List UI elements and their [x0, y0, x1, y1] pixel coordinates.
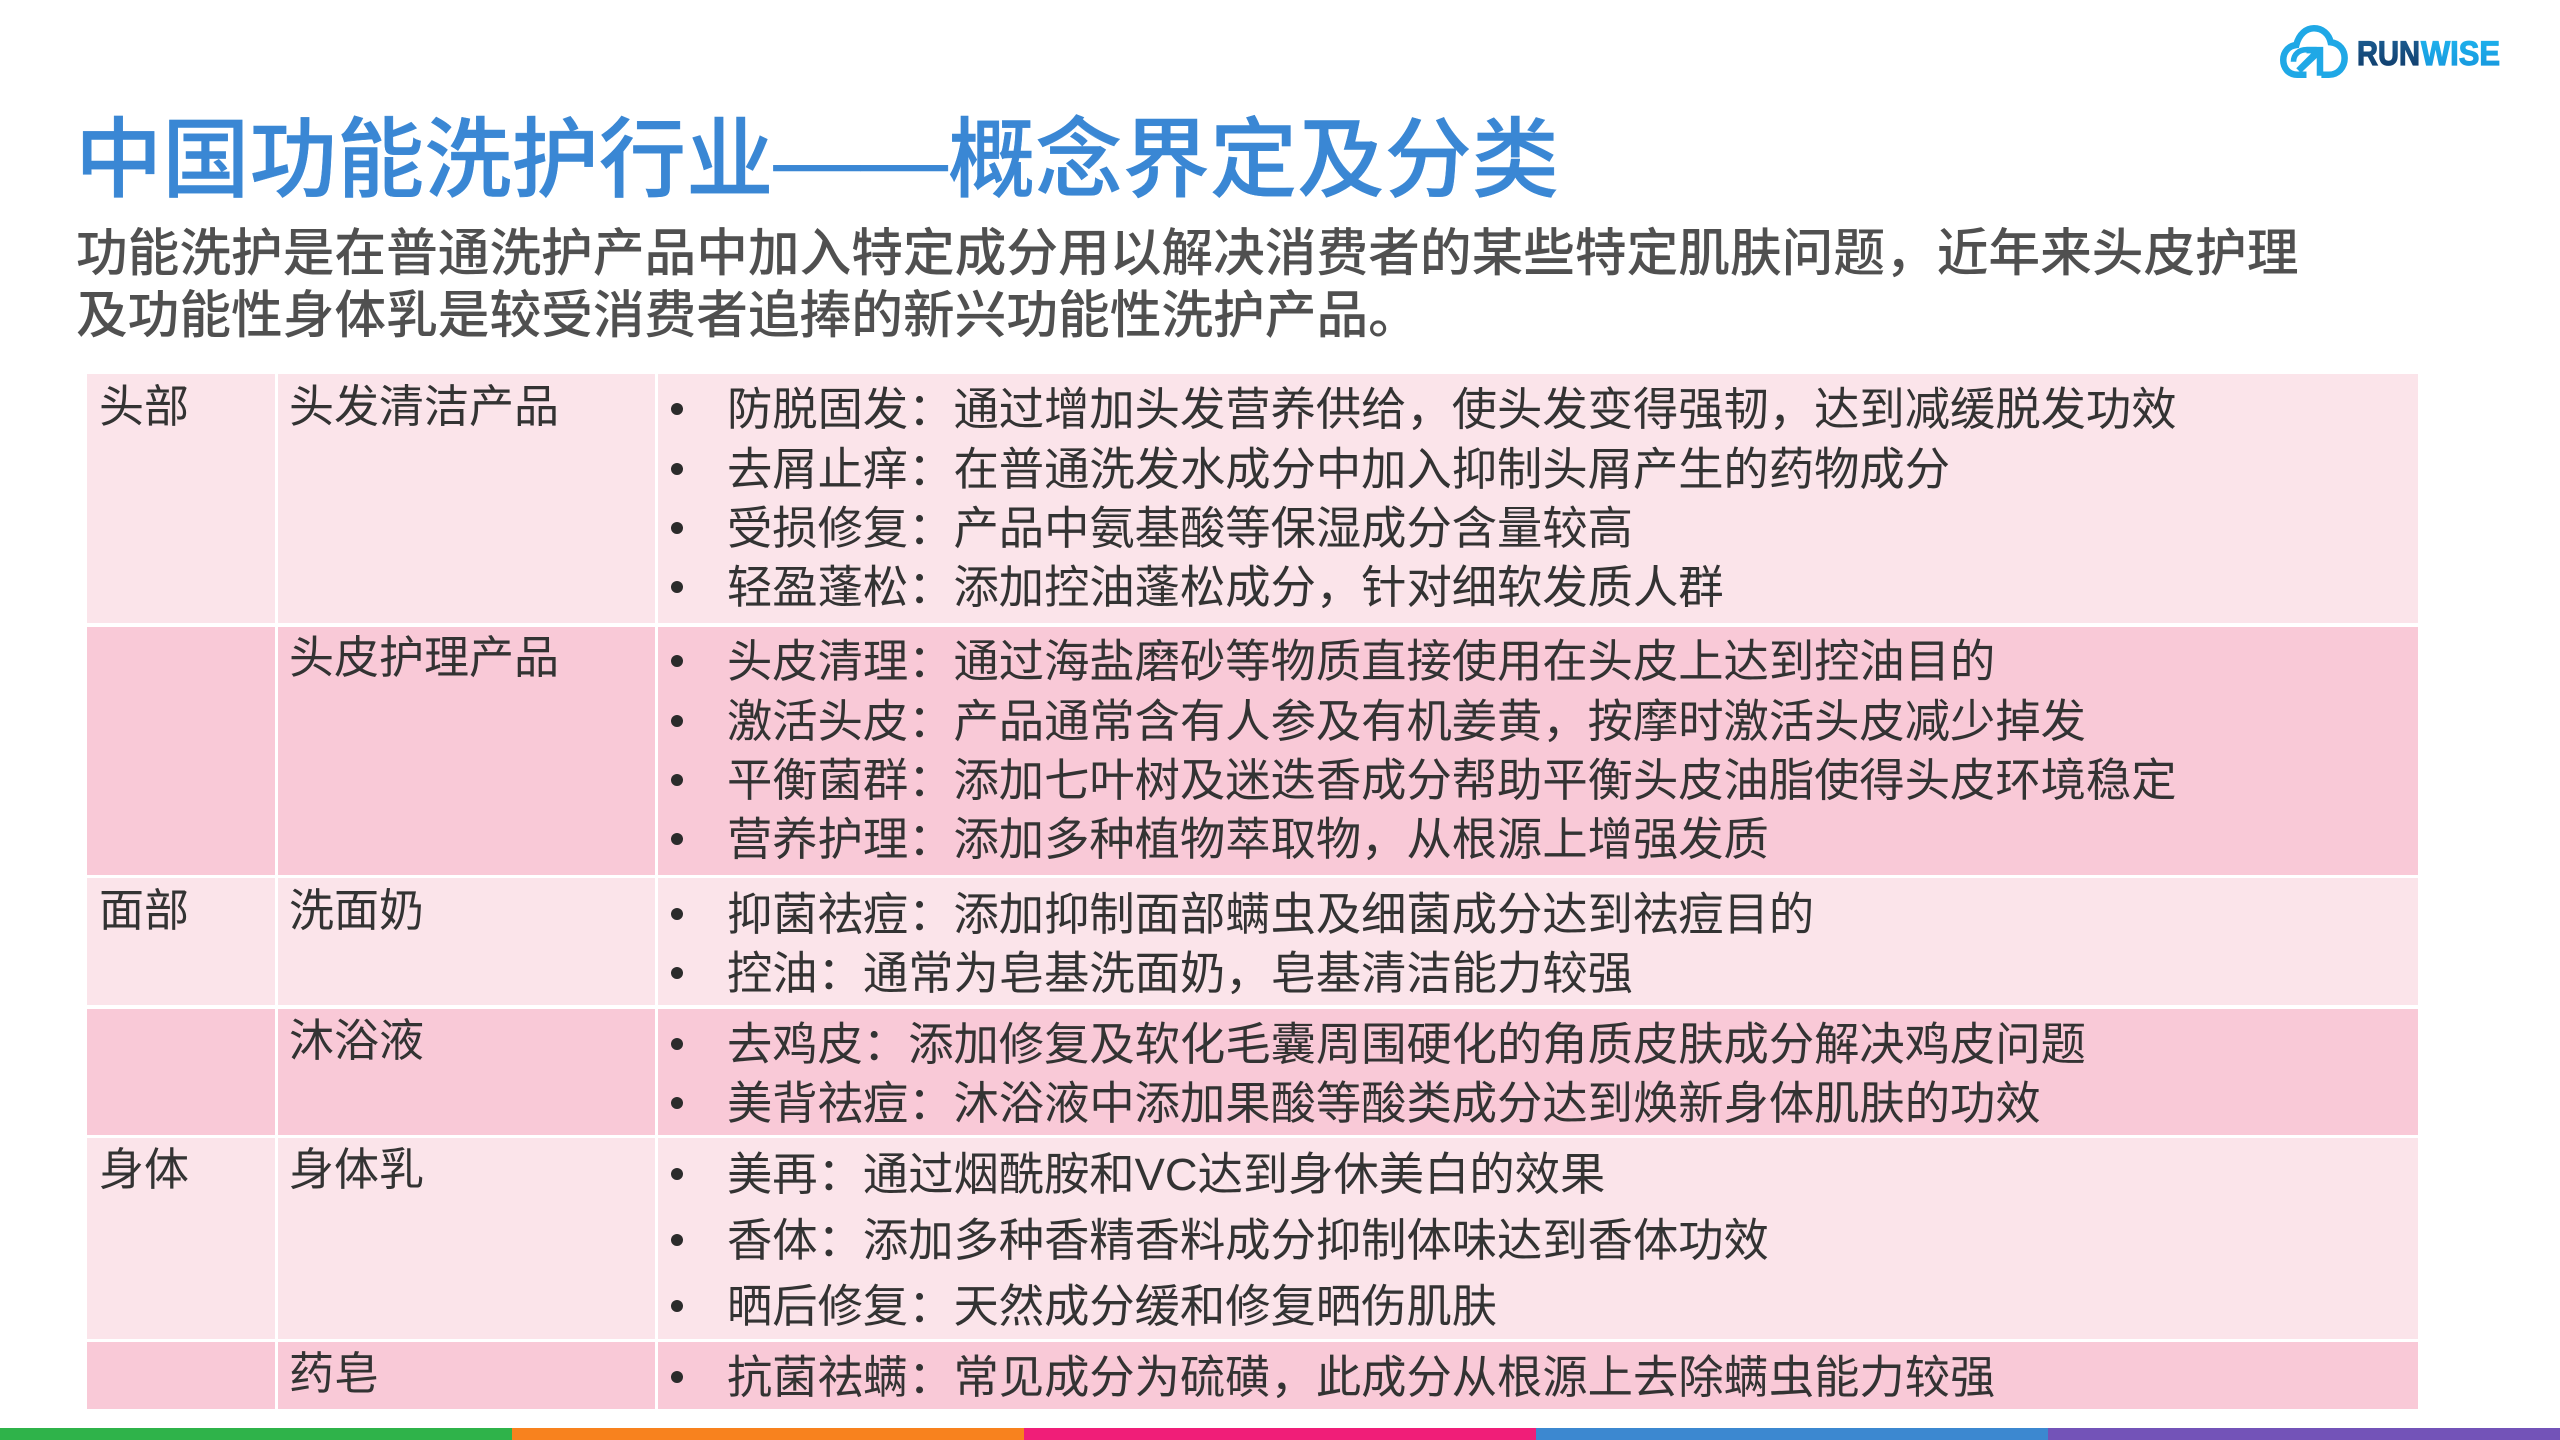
benefit list — [671, 636, 2177, 865]
panel: scalp care row — [87, 627, 2418, 875]
product: body lotion: 身体乳 — [289, 1144, 424, 1195]
benefit list: 受损修复：产品中氨基酸等保湿成分含量较高 — [727, 503, 1633, 554]
product: scalp care: 头皮护理产品 — [289, 632, 559, 683]
subtitle text block — [76, 224, 2299, 344]
panel: medicated soap row — [87, 1342, 2418, 1409]
logo: Runwise — [2280, 25, 2500, 78]
benefit list — [671, 1149, 1769, 1332]
benefit list: 激活头皮：产品通常含有人参及有机姜黄，按摩时激活头皮减少掉发 — [727, 696, 2086, 747]
category: face: 面部 — [99, 885, 189, 936]
title: 中国功能洗护行业——概念界定及分类 — [75, 111, 1559, 209]
product: medicated soap: 药皂 — [289, 1348, 379, 1399]
product: body wash: 沐浴液 — [289, 1015, 424, 1066]
benefit list: 头皮清理：通过海盐磨砂等物质直接使用在头皮上达到控油目的 — [727, 636, 1995, 687]
benefit list: 平衡菌群：添加七叶树及迷迭香成分帮助平衡头皮油脂使得头皮环境稳定 — [727, 755, 2177, 806]
logo: Runwise: RUN — [2357, 35, 2420, 73]
product: hair cleansing: 头发清洁产品 — [289, 381, 559, 432]
benefit list: 去屑止痒：在普通洗发水成分中加入抑制头屑产生的药物成分 — [727, 444, 1950, 495]
benefit list: 美再：通过烟酰胺和VC达到身休美白的效果 — [727, 1149, 1605, 1200]
benefit list: 防脱固发：通过增加头发营养供给，使头发变得强韧，达到减缓脱发功效 — [727, 384, 2177, 435]
benefit list: 控油：通常为皂基洗面奶，皂基清洁能力较强 — [727, 948, 1633, 999]
benefit list: 抑菌祛痘：添加抑制面部螨虫及细菌成分达到祛痘目的 — [727, 889, 1814, 940]
category: head: 头部 — [99, 381, 189, 432]
benefit list — [671, 889, 1814, 999]
benefit list: 去鸡皮：添加修复及软化毛囊周围硬化的角质皮肤成分解决鸡皮问题 — [727, 1019, 2086, 1070]
classification table — [87, 374, 2418, 1409]
category: body: 身体 — [99, 1144, 189, 1195]
benefit list: 香体：添加多种香精香料成分抑制体味达到香体功效 — [727, 1215, 1769, 1266]
benefit list: 抗菌祛螨：常见成分为硫磺，此成分从根源上去除螨虫能力较强 — [727, 1352, 1995, 1403]
benefit list — [671, 1019, 2086, 1129]
panel: body wash row — [87, 1009, 2418, 1135]
subtitle text block: 功能洗护是在普通洗护产品中加入特定成分用以解决消费者的某些特定肌肤问题，近年来头皮护理 — [76, 224, 2299, 282]
benefit list: 晒后修复：天然成分缓和修复晒伤肌肤 — [727, 1281, 1497, 1332]
panel: face cleanser row — [87, 878, 2418, 1005]
panel: body lotion row — [87, 1138, 2418, 1339]
benefit list: 美背祛痘：沐浴液中添加果酸等酸类成分达到焕新身体肌肤的功效 — [727, 1078, 2041, 1129]
panel: head hair cleansing row — [87, 374, 2418, 623]
benefit list: 轻盈蓬松：添加控油蓬松成分，针对细软发质人群 — [727, 562, 1724, 613]
product: face cleanser: 洗面奶 — [289, 885, 424, 936]
benefit list — [671, 384, 2177, 613]
footer colour bar — [0, 1428, 2560, 1440]
subtitle text block: 及功能性身体乳是较受消费者追捧的新兴功能性洗护产品。 — [76, 286, 1420, 344]
logo: Runwise: WISE — [2421, 35, 2500, 73]
benefit list: 营养护理：添加多种植物萃取物，从根源上增强发质 — [727, 814, 1769, 865]
